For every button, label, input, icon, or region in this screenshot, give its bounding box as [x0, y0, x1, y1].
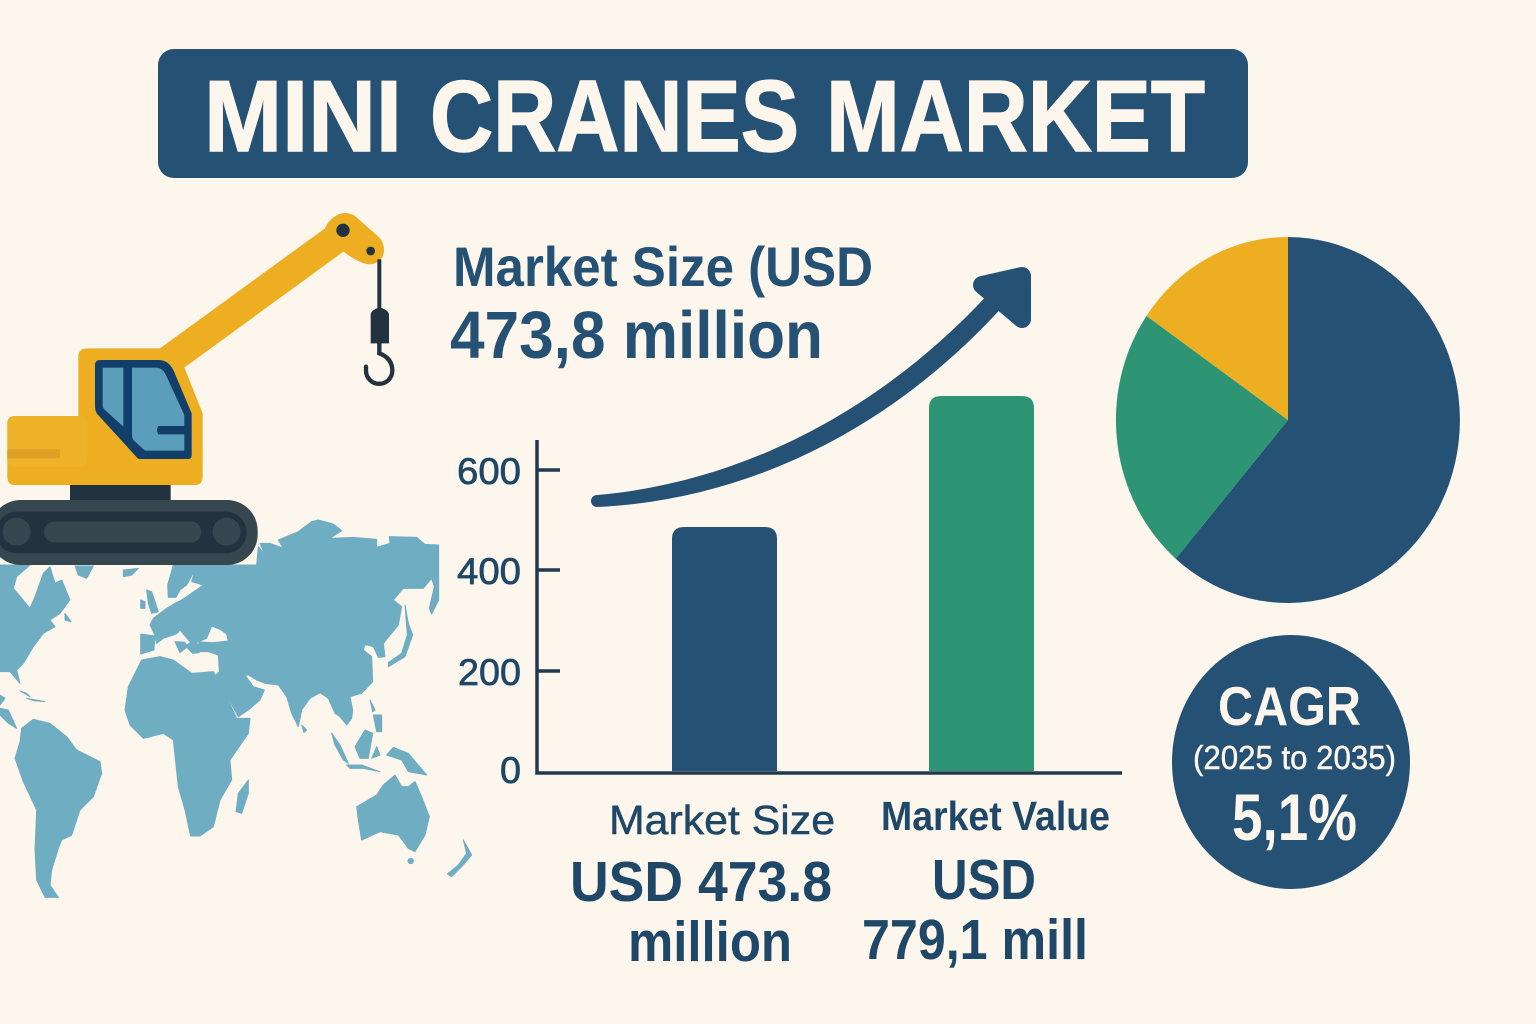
- title banner: [158, 49, 1248, 178]
- heading: market size: 473,8 million: [450, 298, 823, 373]
- cab window: [95, 360, 192, 459]
- boom pins: [336, 224, 375, 255]
- label: market value: 779,1 mill: [862, 908, 1088, 972]
- label: market size value: Market Size: [609, 797, 835, 843]
- axis labels: 200: [458, 652, 521, 693]
- title banner: MINI: [204, 61, 402, 173]
- axis labels: 0: [500, 750, 521, 791]
- chart axes: [537, 440, 1122, 773]
- label: market value: Market Value: [881, 793, 1110, 839]
- label: market value: USD: [932, 848, 1036, 912]
- CAGR badge: [1172, 635, 1410, 889]
- axis labels: 400: [457, 551, 521, 592]
- pie slice: navy: [1176, 237, 1460, 603]
- counterweight: [7, 416, 87, 467]
- CAGR badge: (2025 to 2035): [1193, 739, 1396, 776]
- bar chart: [457, 396, 1122, 791]
- label: market size value: USD 473.8: [570, 850, 832, 914]
- label: market size value: [570, 797, 835, 974]
- CAGR badge: 5,1%: [1232, 780, 1357, 854]
- crane boom: [160, 213, 384, 368]
- pie slice: green: [1116, 316, 1288, 559]
- bar: market value: [929, 396, 1034, 771]
- title banner: CRANES: [430, 61, 799, 173]
- heading: market size: Market Size (USD: [453, 235, 873, 298]
- arrow: growth trend: [591, 276, 1022, 507]
- cab body: [7, 348, 203, 485]
- pie slice: yellow: [1146, 237, 1288, 420]
- title banner: MARKET: [826, 61, 1205, 173]
- bar: market size: [672, 527, 777, 771]
- label: market value: [862, 793, 1110, 972]
- cable and hook: [366, 259, 392, 384]
- icon: mini crane: [0, 213, 392, 565]
- pie chart: [1116, 237, 1460, 603]
- axis labels: [457, 451, 521, 791]
- world map: [0, 520, 472, 897]
- tracks: [0, 485, 258, 565]
- axis labels: 600: [457, 451, 521, 492]
- heading: market size: [450, 235, 873, 373]
- label: market size value: million: [628, 910, 792, 974]
- CAGR badge: CAGR: [1218, 675, 1361, 737]
